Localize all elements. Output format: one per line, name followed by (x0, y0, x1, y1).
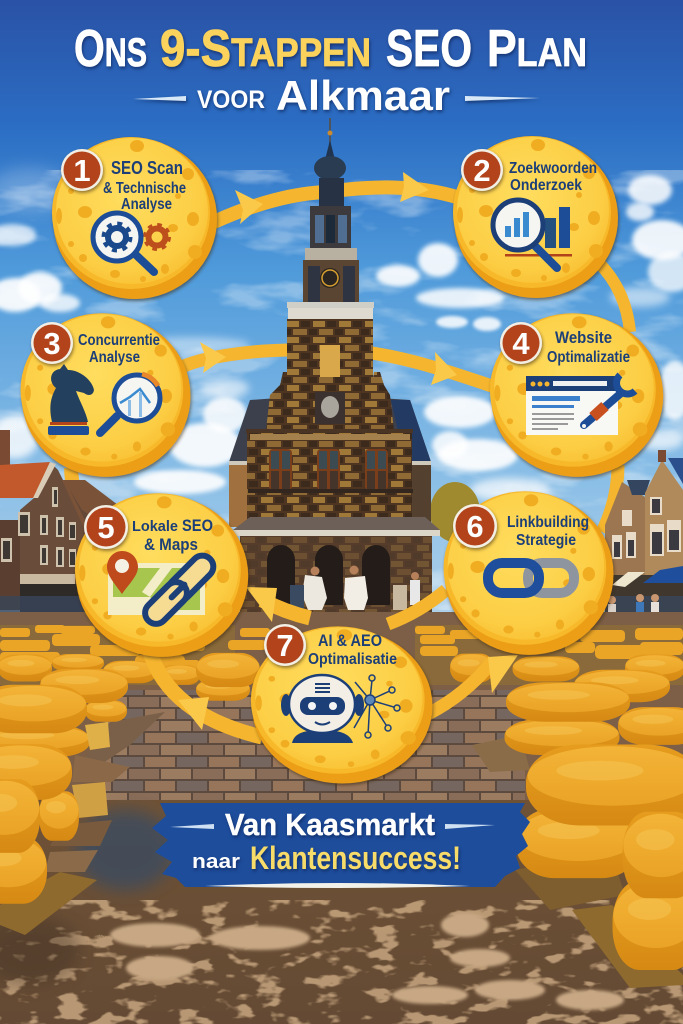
panel: step 5 Lokale SEO & Maps (75, 493, 248, 657)
panel: step 7 AI & AEO Optimalisatie (251, 624, 432, 784)
step 1 label: & Technische (103, 180, 186, 197)
title (74, 20, 587, 78)
arrow: step 3 to step 5 (71, 468, 90, 522)
step 2 label: Zoekwoorden (509, 160, 597, 177)
step 3 label: Analyse (89, 349, 140, 366)
banner dashes (170, 824, 495, 829)
step 4 badge: 4 (512, 326, 530, 361)
step 5 label (132, 516, 213, 554)
tower spire and lantern (303, 118, 359, 306)
cheese stacks left (0, 653, 260, 935)
step 3 label (78, 332, 160, 366)
step 5 label: SEO (182, 516, 213, 535)
step 7 label: AI & AEO (318, 631, 382, 650)
banner (152, 803, 530, 888)
distant cheese rows right (415, 625, 683, 685)
icon: neural network (354, 675, 400, 738)
town buildings right (605, 450, 683, 620)
sky background (0, 0, 683, 640)
panel: step 2 Zoekwoorden Onderzoek (453, 136, 618, 298)
panel: step 1 SEO Scan (52, 137, 217, 299)
step 6 label: Strategie (516, 532, 576, 549)
banner subline: naar (192, 851, 240, 873)
town hall (229, 302, 440, 612)
step 5 badge: 5 (97, 510, 115, 545)
step 1 badge: 1 (73, 153, 91, 188)
subtitle: Alkmaar (276, 72, 450, 119)
step 1 label (103, 158, 186, 213)
step 6 badge: 6 (466, 509, 484, 544)
icon: robot (281, 675, 364, 743)
icon: location pin (107, 551, 138, 594)
step 6 label: Linkbuilding (507, 514, 589, 531)
cheese carriers (290, 566, 420, 610)
banner headline: Van Kaasmarkt (225, 807, 435, 842)
step 4 label: Website (555, 328, 612, 347)
step 4 label (547, 328, 630, 366)
step 7 badge: 7 (276, 628, 294, 663)
town buildings left (0, 430, 118, 614)
step 2 badge: 2 (473, 153, 491, 188)
step 6 label (507, 514, 589, 549)
icon: chess knight (48, 364, 94, 435)
icon: magnifier with chart (100, 374, 160, 433)
step 3 label: Concurrentie (78, 332, 160, 349)
icon: browser window with wrench (526, 375, 635, 435)
title: SEO (386, 20, 472, 78)
banner subline: Klantensuccess! (250, 840, 461, 876)
cheese stacks right (472, 670, 683, 988)
distant cheese rows left (0, 625, 270, 685)
icon: chain link (141, 551, 218, 628)
arrow: step 3 to step 4 (184, 342, 492, 386)
arrow: step 6 to step 7 (388, 590, 446, 624)
arrow: step 1 to step 2 (214, 172, 460, 224)
subtitle (133, 72, 540, 119)
step 3 badge: 3 (43, 326, 61, 361)
step 2 label (509, 160, 597, 194)
icon: map (108, 563, 205, 615)
step 4 badge (500, 322, 542, 364)
wispy clouds (0, 170, 683, 610)
subtitle: VOOR (197, 86, 265, 114)
arrow: step 5 to step 7 (150, 652, 262, 737)
icon: chain (488, 563, 574, 593)
step 7 label (308, 631, 397, 668)
step 1 label: SEO Scan (111, 158, 183, 178)
step 5 label: Lokale (132, 518, 178, 535)
banner subline (192, 840, 461, 876)
step 6 badge (453, 504, 497, 548)
step 1 label: Analyse (121, 196, 172, 213)
panel: step 6 Linkbuilding Strategie (444, 491, 614, 655)
step 3 badge (31, 322, 73, 364)
dirt foreground (0, 800, 683, 1024)
step 4 label: Optimalizatie (547, 349, 630, 366)
step 2 label: Onderzoek (510, 177, 582, 194)
clouds (0, 168, 683, 502)
arrow: step 7 to step 6 (428, 655, 518, 714)
step 7 label: Optimalisatie (308, 651, 397, 668)
title: 9-STAPPEN (160, 20, 371, 78)
cobblestone street (105, 690, 525, 805)
step 1 badge (61, 149, 103, 191)
title: ONS (74, 20, 147, 78)
title: PLAN (487, 20, 587, 78)
step 5 badge (84, 505, 128, 549)
icon: magnifier with gear (93, 213, 154, 272)
step 7 badge (264, 624, 306, 666)
arrow: step 7 to step 5 (246, 587, 310, 622)
arrow: step 2 to step 4 (598, 262, 630, 332)
crowd silhouettes (0, 594, 683, 622)
step 5 label: & Maps (144, 535, 198, 554)
arrow: step 4 to step 6 (602, 465, 618, 532)
icon: orange gear (145, 225, 169, 249)
panel: step 4 Website Optimalizatie (490, 313, 663, 477)
step 2 badge (461, 149, 503, 191)
icon: bars and magnifier (493, 200, 572, 268)
tree (430, 482, 480, 542)
panel: step 3 Concurrentie Analyse (21, 313, 191, 477)
market square ground (0, 612, 683, 802)
